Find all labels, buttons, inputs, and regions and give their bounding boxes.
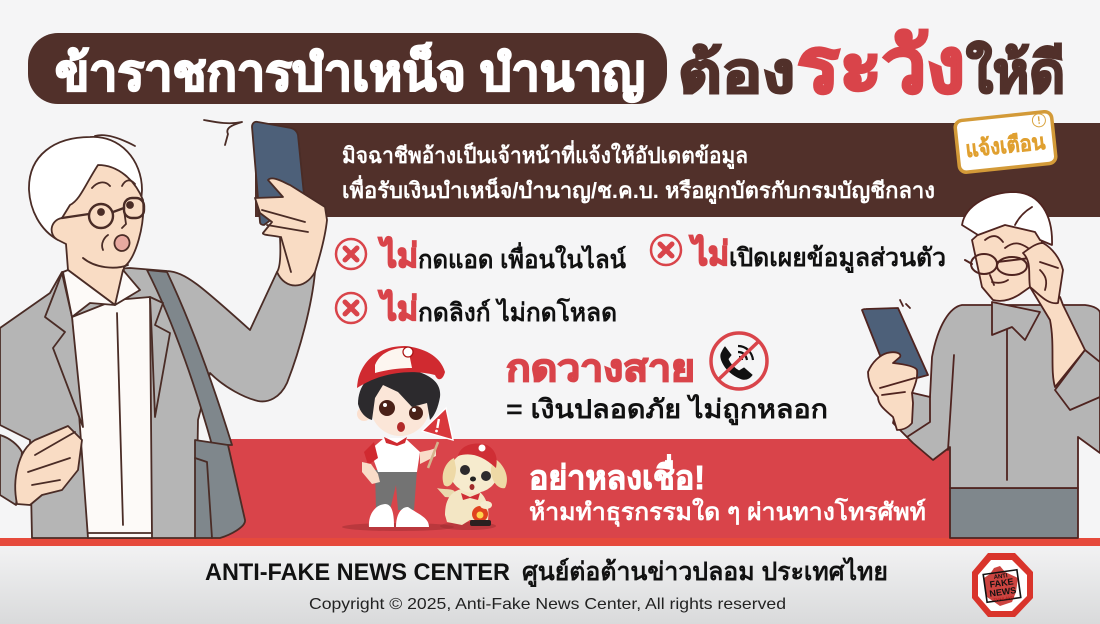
collar (992, 302, 1040, 340)
badge: alert: แจ้งเตือน (964, 129, 1046, 162)
hand on glasses (1023, 243, 1063, 303)
jacket (0, 268, 315, 538)
title tail (678, 24, 1065, 109)
panel: warning band (255, 123, 1100, 217)
lapels (45, 273, 83, 427)
panel: footer: ศูนย์ต่อต้านข่าวปลอม ประเทศไทย (522, 556, 888, 588)
list item: no link (336, 289, 617, 327)
text: safe money: = เงินปลอดภัย ไม่ถูกหลอก (506, 393, 828, 426)
panel: warning band: เพื่อรับเงินบำเหน็จ/บำนาญ/ช.ค.บ. หรือผูกบัตรกับกรมบัญชีกลาง (342, 174, 935, 205)
illustration: left man (0, 120, 327, 538)
illustration: mascot boy (342, 346, 454, 531)
phone (252, 122, 304, 225)
title pill: ข้าราชการบำเหน็จ บำนาญ (55, 42, 645, 102)
logo: anti fake news: ANTI (993, 573, 1008, 581)
shirt (72, 297, 152, 538)
sign (422, 408, 453, 468)
hair tuft (95, 120, 242, 146)
arms (362, 462, 380, 484)
panel: footer (0, 546, 1100, 624)
list item: no add (336, 236, 626, 274)
shirt (893, 305, 1100, 488)
hair (358, 368, 440, 420)
title tail: ต้อง (678, 41, 795, 104)
logo: anti fake news: FAKE (989, 576, 1014, 590)
phone (862, 308, 928, 378)
ear (357, 407, 371, 421)
face (972, 215, 1042, 301)
glasses (89, 204, 113, 228)
list item: no link: ไม่ (378, 289, 418, 327)
panel: warning band: มิจฉาชีพอ้างเป็นเจ้าหน้าที่แจ้งให้อัปเดตข้อมูล (342, 139, 748, 170)
glasses (971, 254, 997, 274)
panel: footer: ANTI-FAKE NEWS CENTER (205, 559, 510, 586)
illustration: right man (862, 192, 1100, 538)
text: do not believe (529, 454, 926, 528)
hair (29, 137, 142, 240)
badge: alert (955, 111, 1056, 173)
list item: no personal data (651, 234, 946, 274)
left arm (0, 435, 22, 505)
panel: footer: Copyright © 2025, Anti-Fake News Center, All rights reserved (309, 596, 786, 613)
raised hand (255, 178, 327, 286)
head (370, 374, 430, 436)
illustration: mascot dog (437, 443, 507, 530)
neck and face (52, 165, 143, 305)
arm right (1030, 287, 1085, 387)
lamp (472, 506, 488, 522)
collar (63, 270, 140, 317)
panel: red band (0, 439, 1100, 546)
list item: no link: กดลิงก์ ไม่กดโหลด (418, 297, 617, 327)
shoes (369, 504, 394, 527)
strap (147, 270, 232, 445)
bag (195, 440, 245, 538)
shirt (370, 438, 420, 472)
logo: anti fake news: NEWS (989, 585, 1017, 599)
logo: anti fake news (972, 553, 1033, 617)
pants (375, 470, 417, 510)
cap (357, 346, 445, 388)
list item: no add: ไม่ (378, 236, 418, 274)
list item: no personal data: เปิดเผยข้อมูลส่วนตัว (729, 244, 946, 274)
title tail: ระวัง (797, 24, 965, 109)
sleeve right (1055, 350, 1100, 410)
list item: no add: กดแอด เพื่อนในไลน์ (418, 242, 626, 274)
mouth (113, 233, 131, 253)
hair (962, 192, 1052, 245)
text: do not believe: อย่าหลงเชื่อ! (529, 454, 705, 496)
heading: hang up: กดวางสาย (506, 348, 695, 390)
list item: no personal data: ไม่ (689, 234, 729, 272)
lower hand (868, 352, 917, 430)
head (450, 451, 498, 493)
trousers (950, 488, 1078, 538)
title tail: ให้ดี (966, 40, 1065, 104)
logo: anti fake news: THAILAND (993, 594, 1014, 602)
text: do not believe: ห้ามทำธุรกรรมใด ๆ ผ่านทางโทรศัพท์ (529, 497, 926, 528)
icon: no phone (711, 333, 767, 389)
lower hand (15, 426, 82, 505)
